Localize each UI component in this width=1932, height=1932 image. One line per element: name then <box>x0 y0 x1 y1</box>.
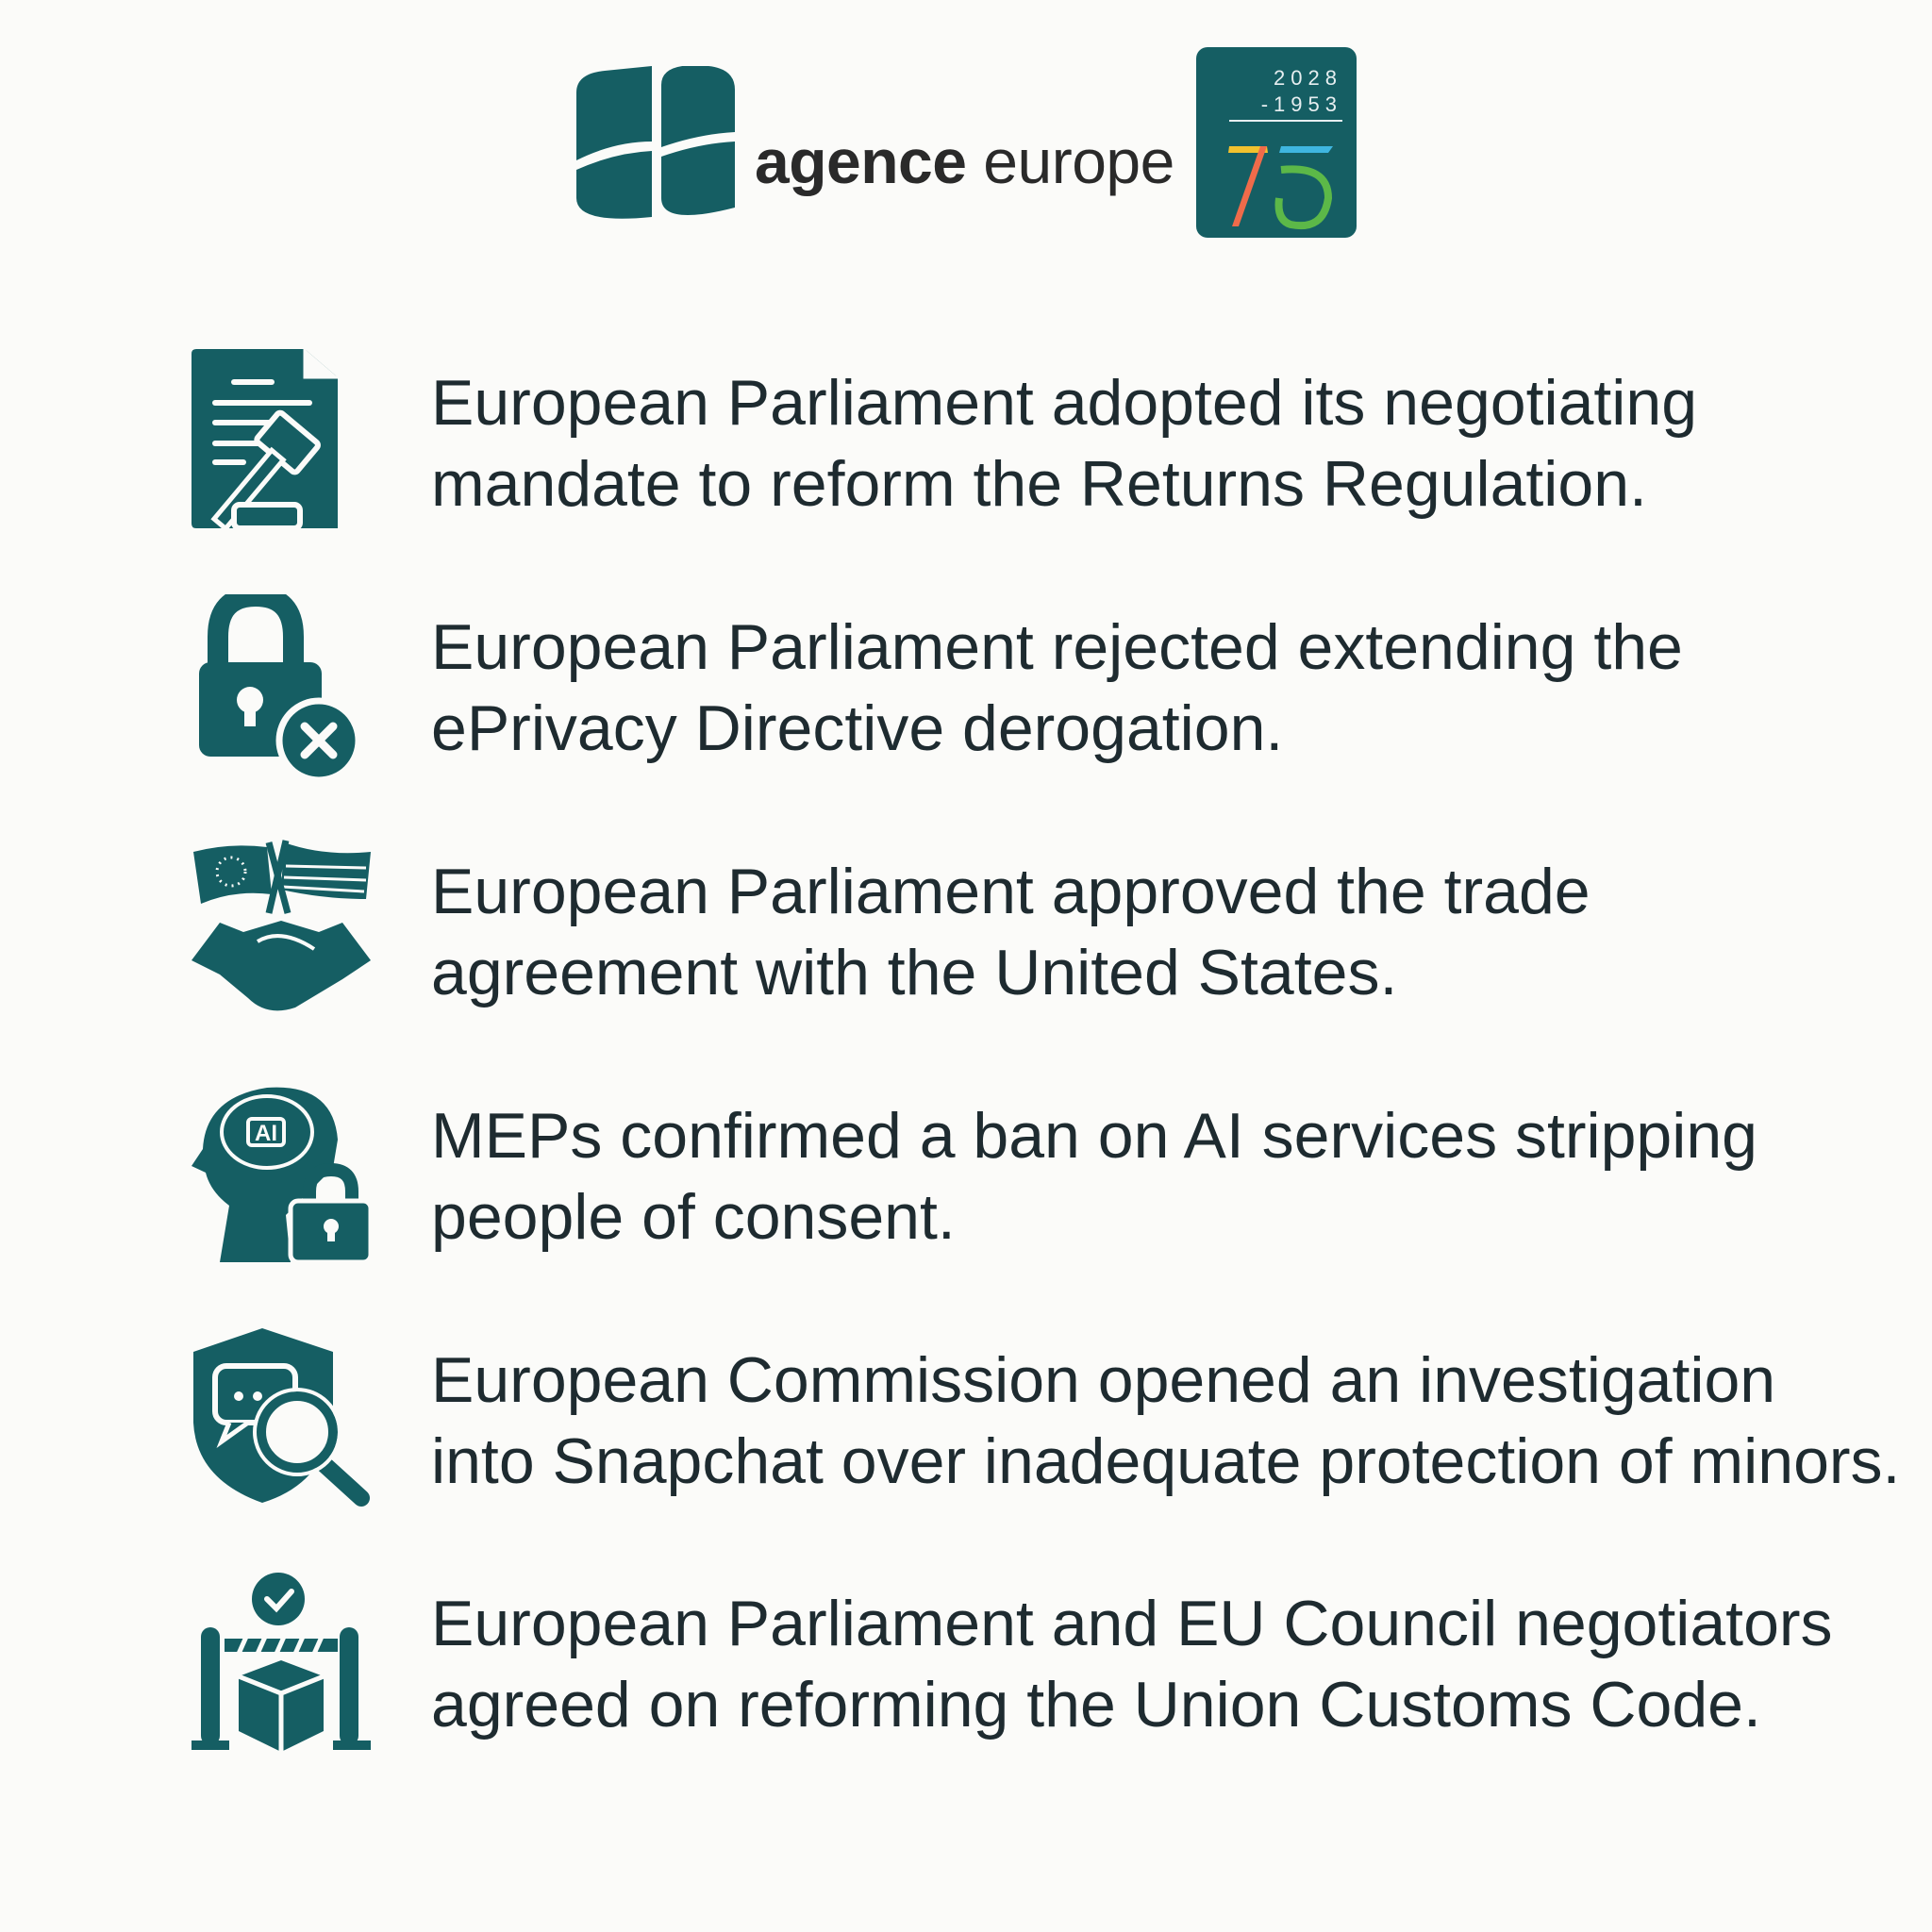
row 2 text: ePrivacy Directive derogation. <box>431 692 1283 764</box>
row 1 icon: document with gavel <box>192 349 338 528</box>
row 3 text: agreement with the United States. <box>431 937 1397 1008</box>
row 5 text: European Commission opened an investigation <box>431 1344 1775 1416</box>
row 6 text: European Parliament and EU Council negotiators <box>431 1588 1833 1659</box>
row 6 icon: customs barrier with box <box>192 1573 371 1751</box>
row 6 text: agreed on reforming the Union Customs Code. <box>431 1669 1761 1740</box>
row 4 text <box>431 1100 1757 1253</box>
row 5 text: into Snapchat over inadequate protection of minors. <box>431 1425 1900 1497</box>
logo mark <box>576 66 735 219</box>
row 3 icon: flags and handshake <box>192 840 371 1011</box>
row 3 text <box>431 856 1591 1008</box>
row 4 icon: AI head with lock: AI <box>255 1121 277 1146</box>
row 1 text <box>431 367 1697 520</box>
row 6 text <box>431 1588 1833 1740</box>
logo text: agence europe <box>755 126 1174 196</box>
row 5 text <box>431 1344 1900 1497</box>
row 1 text: European Parliament adopted its negotiating <box>431 367 1697 439</box>
row 4 text: people of consent. <box>431 1181 956 1253</box>
row 2 icon: lock with x <box>199 594 355 777</box>
75 anniversary badge: -1953 <box>1261 92 1342 116</box>
row 5 icon: shield with chat and magnifier <box>193 1328 370 1507</box>
row 2 text: European Parliament rejected extending the <box>431 611 1683 683</box>
row 3 text: European Parliament approved the trade <box>431 856 1591 927</box>
row 2 text <box>431 611 1683 764</box>
row 4 text: MEPs confirmed a ban on AI services stripping <box>431 1100 1757 1172</box>
row 1 text: mandate to reform the Returns Regulation. <box>431 448 1647 520</box>
75 anniversary badge <box>1196 47 1357 238</box>
75 anniversary badge: 2028 <box>1274 66 1342 90</box>
logo <box>576 47 1357 238</box>
row 4 icon: AI head with lock <box>192 1087 368 1262</box>
